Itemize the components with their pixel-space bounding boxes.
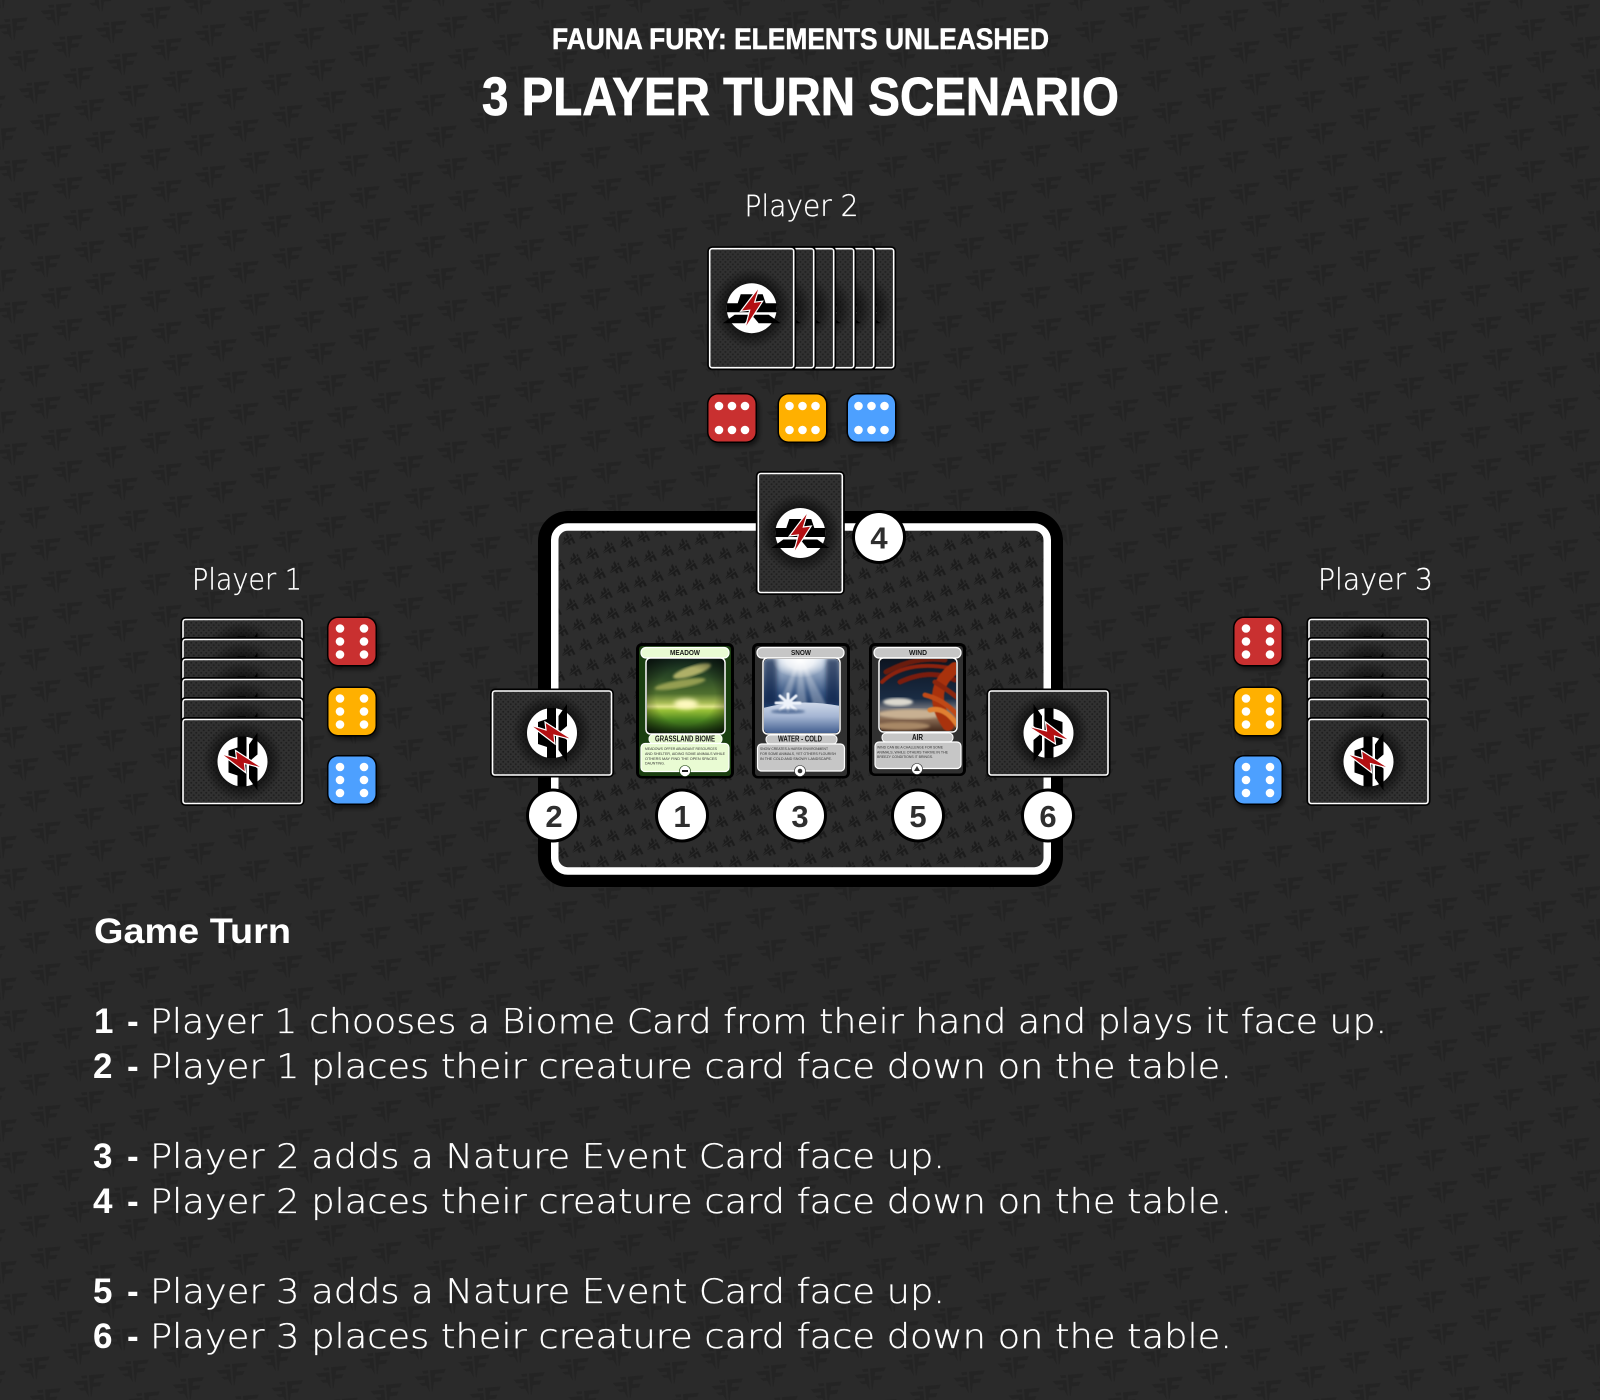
wind artwork xyxy=(880,659,956,731)
card 5: wind nature event: WIND xyxy=(909,650,927,657)
label: player 1: Player 1 xyxy=(192,562,302,596)
panel: player 2 xyxy=(707,189,896,443)
step 3: Player 2 adds a Nature Event Card face up. xyxy=(150,1137,945,1177)
card 2: player 1 creature face down xyxy=(490,688,614,778)
label: player 2: Player 2 xyxy=(744,189,858,223)
snow artwork xyxy=(764,659,839,733)
card 3: snow nature event xyxy=(752,642,850,778)
step 2: Player 1 places their creature card face down on the table. xyxy=(150,1047,1232,1087)
heading: game turn: Game Turn xyxy=(94,912,291,951)
subtitle: game name: FAUNA FURY: ELEMENTS UNLEASHED xyxy=(552,23,1049,56)
step 2: 2 xyxy=(93,1047,112,1086)
player 3 hand of cards xyxy=(1306,617,1430,806)
step 6: Player 3 places their creature card face down on the table. xyxy=(150,1317,1232,1357)
card 3: snow nature event: WATER - COLD xyxy=(778,735,822,744)
step 4: - xyxy=(127,1182,139,1221)
badge 4: 4 xyxy=(870,520,888,556)
card 5: wind nature event xyxy=(869,643,966,776)
card 1: meadow biome: DAUNTING. xyxy=(645,760,665,766)
step 5: - xyxy=(127,1272,139,1311)
step 2: - xyxy=(127,1047,139,1086)
step 4: Player 2 places their creature card face down on the table. xyxy=(150,1182,1232,1222)
step 1: Player 1 chooses a Biome Card from their hand and plays it face up. xyxy=(150,1002,1387,1042)
card 1: meadow biome: OTHERS MAY FIND THE OPEN SPACES xyxy=(645,756,717,761)
title: 3 PLAYER TURN SCENARIO xyxy=(482,67,1119,127)
step 6: 6 xyxy=(93,1317,112,1356)
badge 6: 6 xyxy=(1039,799,1057,834)
step 6: - xyxy=(127,1317,139,1356)
step 5: 5 xyxy=(93,1272,112,1311)
player 1 hand of cards xyxy=(180,617,304,806)
panel: play table xyxy=(490,471,1110,887)
player 3 dice xyxy=(1233,616,1283,805)
step 1: 1 xyxy=(94,1002,113,1041)
card 1: meadow biome: MEADOW xyxy=(670,650,700,657)
text block: game turn steps xyxy=(93,912,1387,1357)
card 1: meadow biome: GRASSLAND BIOME xyxy=(655,735,715,744)
card 1: meadow biome: AND SHELTER, AIDING SOME ANIMALS WHILE xyxy=(645,751,725,756)
badge 4 xyxy=(852,510,906,564)
card 3: snow nature event: SNOW xyxy=(791,650,811,657)
step 1: - xyxy=(127,1002,139,1041)
card 5: wind nature event: AIR xyxy=(912,733,923,742)
label: player 3: Player 3 xyxy=(1318,562,1433,596)
badge 3: 3 xyxy=(791,799,809,834)
card 1: meadow biome: MEADOWS OFFER ABUNDANT RESOURCES xyxy=(645,746,717,751)
step 5: Player 3 adds a Nature Event Card face up. xyxy=(150,1272,945,1312)
player 2 hand of cards xyxy=(707,246,896,370)
card 3: snow nature event: IN THE COLD AND SNOWY LANDSCAPE. xyxy=(760,756,832,761)
card 1: meadow biome xyxy=(632,643,740,778)
meadow artwork xyxy=(647,659,724,733)
panel: player 1 xyxy=(180,562,377,806)
player 2 dice xyxy=(707,393,896,443)
step 3: 3 xyxy=(93,1137,112,1176)
card 3: snow nature event: FOR SOME ANIMALS, YET OTHERS FLOURISH xyxy=(760,751,836,756)
card 6: player 3 creature face down xyxy=(986,688,1110,778)
step 3: - xyxy=(127,1137,139,1176)
step 4: 4 xyxy=(93,1182,112,1221)
card 4: player 2 creature face down xyxy=(756,471,845,595)
badge 2 xyxy=(526,788,580,842)
card 3: snow nature event: SNOW CREATES A HARSH ENVIRONMENT xyxy=(760,746,828,751)
card 5: wind nature event: WIND CAN BE A CHALLENGE FOR SOME xyxy=(877,744,943,750)
panel: player 3 xyxy=(1233,562,1433,806)
card 5: wind nature event: ANIMALS, WHILE OTHERS THRIVE IN THE xyxy=(877,750,948,754)
badge 1: 1 xyxy=(673,799,691,834)
badge 1 xyxy=(655,788,709,842)
badge 2: 2 xyxy=(545,799,563,834)
card 5: wind nature event: BREEZY CONDITIONS IT BRINGS. xyxy=(877,754,933,759)
badge 5: 5 xyxy=(909,799,927,834)
badge 3 xyxy=(773,788,827,842)
badge 5 xyxy=(891,788,945,842)
badge 6 xyxy=(1021,788,1075,842)
player 1 dice xyxy=(327,616,377,805)
